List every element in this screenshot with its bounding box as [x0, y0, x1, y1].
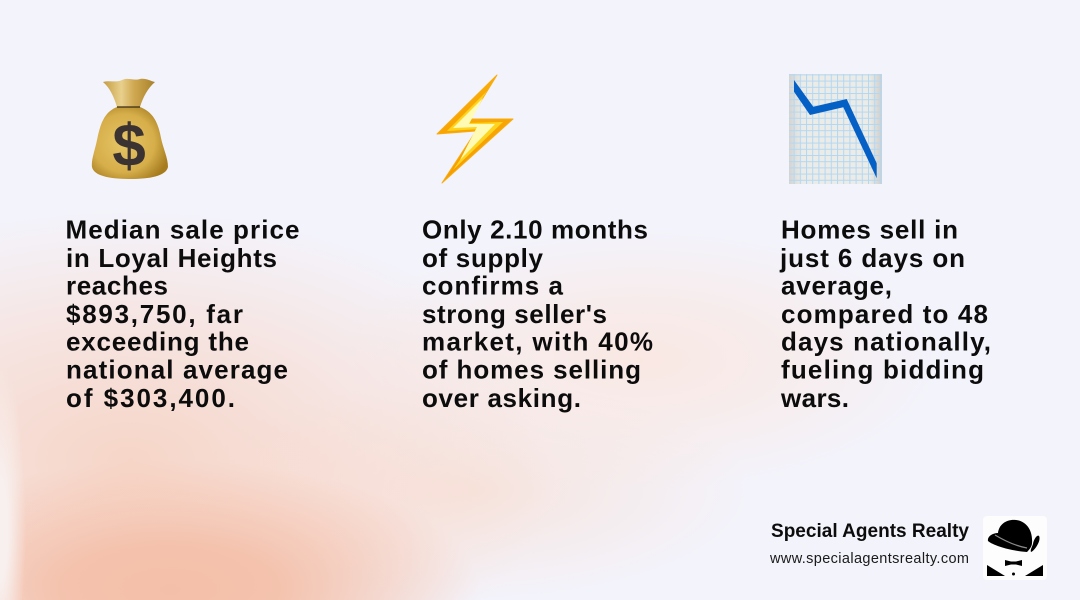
text block: days on market: Homes sell in [781, 214, 958, 244]
text block: months of supply: of supply [422, 243, 544, 273]
text block: months of supply: confirms a [422, 270, 564, 300]
text block: days on market: fueling bidding [781, 354, 984, 384]
text block: median sale price: reaches [66, 270, 168, 300]
text block: days on market: average, [781, 270, 892, 300]
text block: median sale price: of $303,400. [66, 383, 235, 413]
text block: median sale price: exceeding the [66, 326, 249, 356]
text block: months of supply [422, 214, 653, 413]
icon: lightning bolt [437, 75, 513, 183]
website url: www.specialagentsrealty.com [769, 551, 969, 567]
text block: months of supply: of homes selling [422, 354, 641, 384]
text block: days on market: compared to 48 [781, 299, 988, 329]
text block: days on market: just 6 days on [779, 243, 965, 273]
text block: months of supply: strong seller's [422, 299, 607, 329]
icon: chart with downward trend [789, 74, 882, 184]
text block: median sale price: national average [66, 354, 288, 384]
brand name: Special Agents Realty [771, 521, 969, 542]
text block: days on market: days nationally, [781, 326, 991, 356]
text block: months of supply: market, with 40% [422, 326, 653, 356]
text block: median sale price [66, 214, 300, 413]
text block: days on market [779, 214, 991, 413]
text block: months of supply: over asking. [422, 383, 581, 413]
text block: median sale price: in Loyal Heights [66, 243, 277, 273]
text block: months of supply: Only 2.10 months [422, 214, 648, 244]
logo: bowler hat and bow tie [983, 516, 1047, 580]
text block: median sale price: $893,750, far [66, 299, 243, 329]
text block: days on market: wars. [780, 383, 849, 413]
text block: median sale price: Median sale price [66, 214, 300, 244]
icon: money bag: $ [112, 112, 146, 179]
icon: money bag [92, 79, 168, 179]
